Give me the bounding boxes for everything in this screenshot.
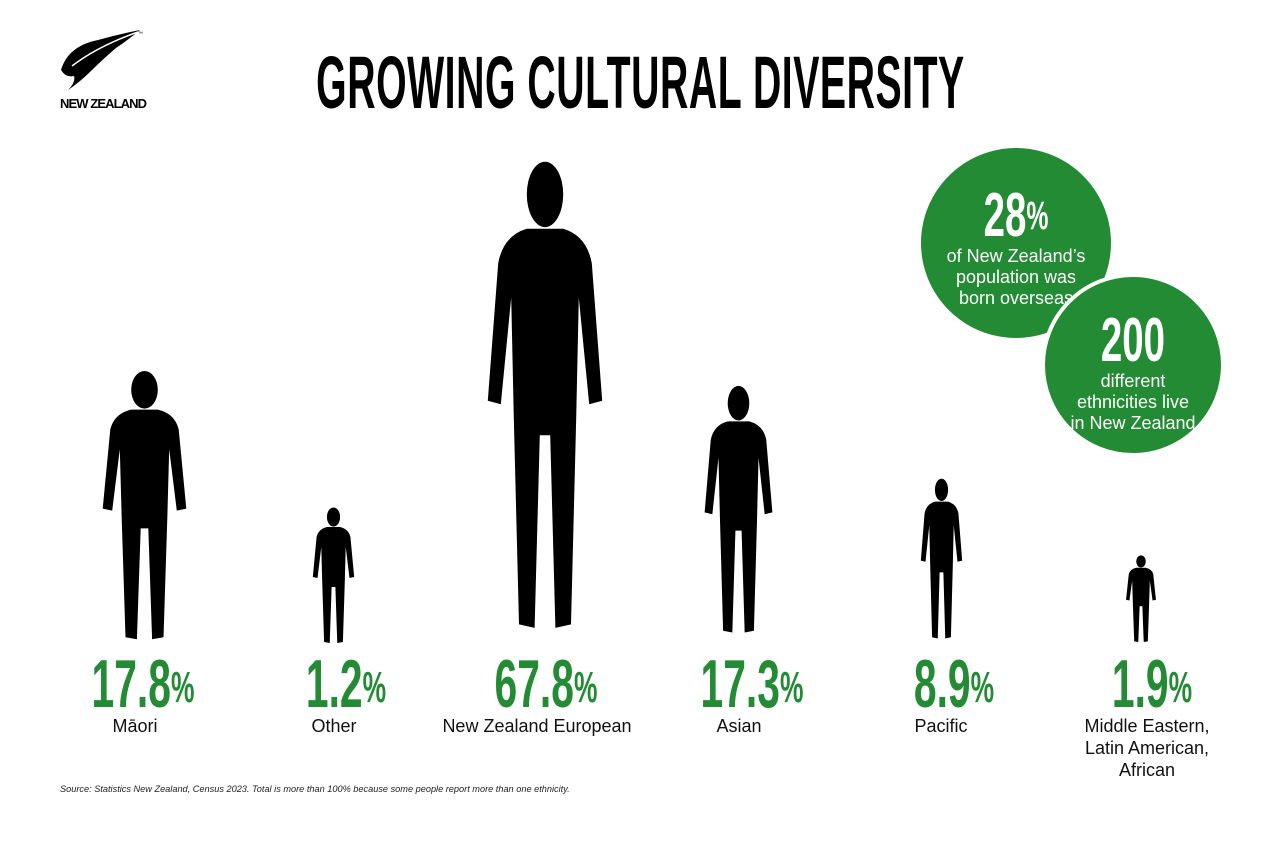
label: Middle Eastern: Latin American,	[1085, 738, 1209, 758]
label: Other: Other	[311, 716, 357, 736]
label: Middle Eastern: African	[1119, 760, 1175, 780]
label: Middle Eastern	[1084, 716, 1210, 780]
silhouette: Maori	[103, 371, 186, 639]
logo	[60, 30, 147, 111]
logo: NEW ZEALAND	[60, 96, 147, 111]
title: GROWING CULTURAL DIVERSITY	[316, 41, 965, 124]
label: Maori: Māori	[112, 716, 158, 736]
circle: ethnicities	[1041, 273, 1225, 457]
circle: ethnicities: in New Zealand	[1070, 413, 1196, 433]
circle: born overseas	[921, 148, 1111, 338]
circle: ethnicities: ethnicities live	[1077, 392, 1189, 412]
label: Middle Eastern: Middle Eastern,	[1084, 716, 1210, 736]
stat: Pacific: 8.9%	[914, 646, 994, 722]
silhouette: Other	[313, 508, 354, 643]
circle: born overseas: of New Zealand’s	[947, 246, 1085, 266]
label: Pacific: Pacific	[914, 716, 968, 736]
stat: Asian: 17.3%	[701, 646, 803, 722]
circle: born overseas: born overseas	[959, 288, 1073, 308]
circle: born overseas: 28%	[984, 181, 1048, 250]
logo: ™	[138, 31, 143, 37]
source note: Source: Statistics New Zealand, Census 2023. Total is more than 100% because some people report more than one ethnicity.	[60, 784, 570, 794]
stat: Maori: 17.8%	[92, 646, 194, 722]
stat: Other: 1.2%	[306, 646, 386, 722]
label: Asian: Asian	[716, 716, 762, 736]
silhouette: Pacific	[921, 479, 962, 638]
stat: Middle Eastern: 1.9%	[1112, 646, 1192, 722]
silhouette: Asian	[705, 386, 772, 633]
circle: born overseas: population was	[956, 267, 1076, 287]
silhouette: NZ European	[488, 162, 602, 628]
circle: ethnicities: 200	[1101, 306, 1165, 375]
silhouette: Middle Eastern	[1126, 555, 1156, 642]
circle: ethnicities: different	[1101, 371, 1165, 391]
label: NZ European: New Zealand European	[442, 716, 632, 736]
stat: NZ European: 67.8%	[495, 646, 597, 722]
